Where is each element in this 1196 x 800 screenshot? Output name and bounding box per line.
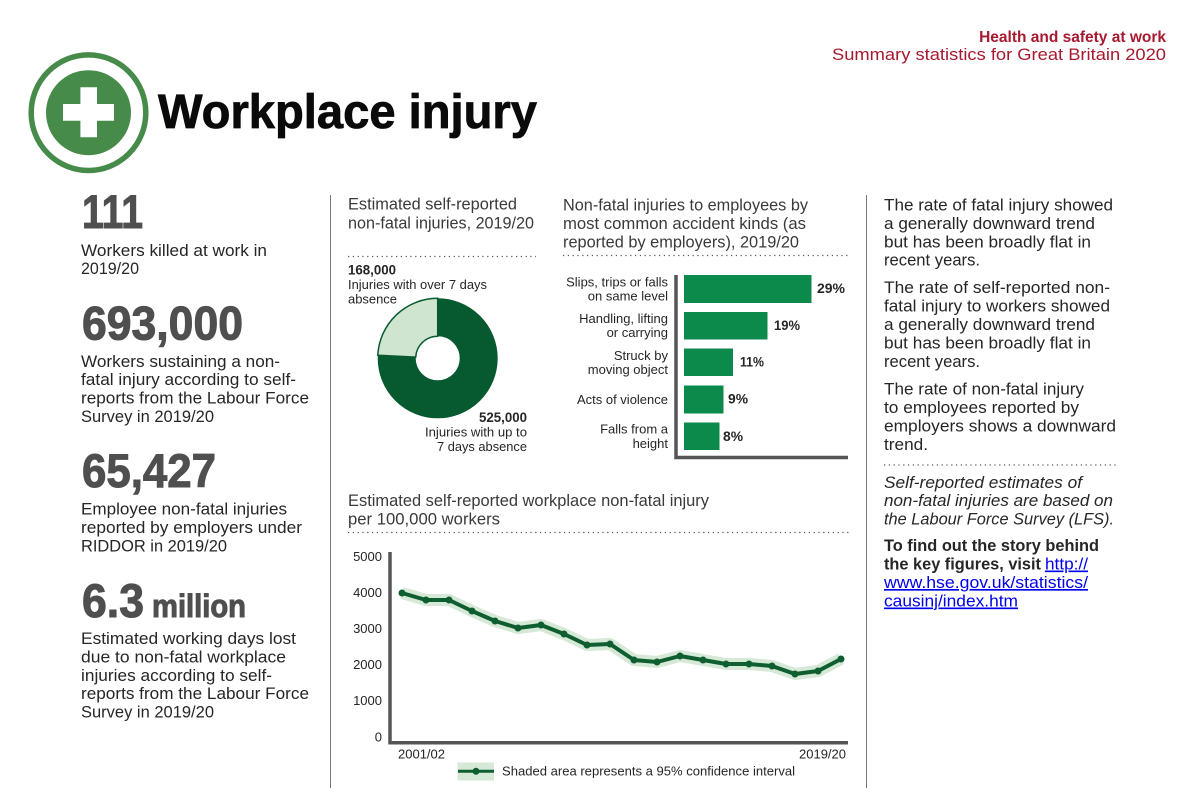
bar chart axes [676,275,848,458]
x axis labels [398,746,846,762]
x axis labels: 2001/02 [398,746,445,762]
heading: donut chart: Estimated self-reported [348,196,517,214]
bar: struck by moving object: Struck by [614,348,668,363]
text: employer-reported injury trend: to employees reported by [884,399,1080,417]
text: link to further information: To find out the story behind [884,537,1099,555]
stat: working days lost: reports from the Labour Force [81,685,309,703]
label: up to 7 days: 7 days absence [437,439,527,454]
y axis labels: 3000 [353,621,382,636]
stat: self-reported non-fatal injuries: reports from the Labour Force [81,390,309,408]
bar: slips, trips or falls: on same level [588,288,668,304]
text: employer-reported injury trend [884,380,1116,454]
stat: workers killed: 111 [82,185,143,238]
stat: self-reported non-fatal injuries: fatal injury according to self- [81,371,296,389]
bar: falls from a height: height [633,436,668,451]
y axis labels: 4000 [353,585,382,600]
stat: working days lost: due to non-fatal workplace [81,648,286,666]
stat: RIDDOR injuries: 65,427 [82,444,216,497]
stat: working days lost: Estimated working days lost [81,630,296,648]
stat: working days lost: injuries according to self- [81,667,272,685]
label: over 7 days: 168,000 [348,262,396,278]
bar: acts of violence: Acts of violence [577,392,668,407]
stat: workers killed: 2019/20 [81,260,139,278]
stat: working days lost: million [152,588,246,624]
y axis labels: 0 [375,730,382,744]
injury rate line [398,590,844,678]
text: link to further information: http:// [1045,556,1088,574]
stat: working days lost [81,574,309,722]
bar: handling, lifting or carrying: or carrying [607,325,668,340]
label: over 7 days [348,262,487,306]
heading: bar chart: Non-fatal injuries to employees by [563,196,809,214]
bar: acts of violence: 9% [728,392,748,406]
header: publication title: Health and safety at work [979,29,1166,46]
heading: bar chart: most common accident kinds (as [563,215,806,233]
bar: handling, lifting or carrying: Handling, lifting [579,311,668,326]
text: link to further information: the key figures, visit [884,556,1041,574]
text: link to further information [883,537,1099,610]
bar: slips, trips or falls [566,274,845,304]
bar: falls from a height [600,422,743,451]
bar: handling, lifting or carrying: 19% [774,318,800,333]
stat: working days lost: 6.3 [82,574,144,627]
stat: RIDDOR injuries [81,444,303,556]
text: self-reported injury trend: The rate of self-reported non- [884,279,1110,297]
label: up to 7 days [425,410,527,454]
x axis labels: 2019/20 [799,746,846,762]
bar: struck by moving object: moving object [588,362,668,377]
stat: RIDDOR injuries: reported by employers under [81,519,303,537]
bar: handling, lifting or carrying [579,311,800,340]
bar: acts of violence [577,386,748,414]
icon: green first aid cross [31,55,146,171]
text: link to further information: causinj/index.htm [884,592,1018,610]
text: self-reported injury trend: fatal injury to workers showed [884,298,1110,316]
bar: slips, trips or falls: Slips, trips or falls [566,274,668,290]
stat: self-reported non-fatal injuries: Survey in 2019/20 [81,408,214,426]
text: fatal injury trend [884,196,1113,270]
text: self-reported injury trend: a generally downward trend [884,316,1095,334]
panel: commentary [883,196,1117,610]
text: fatal injury trend: a generally downward trend [884,215,1095,233]
text: self-reported injury trend [884,279,1110,371]
title: Workplace injury [158,86,537,139]
label: up to 7 days: Injuries with up to [425,424,527,440]
heading: line chart [348,492,710,528]
bar: falls from a height: Falls from a [600,422,669,436]
line chart axes [390,552,848,743]
text: LFS note: Self-reported estimates of [884,474,1085,492]
stat: self-reported non-fatal injuries: 693,000 [82,296,243,350]
stat: working days lost: Survey in 2019/20 [81,704,214,722]
y axis labels: 5000 [353,549,382,564]
text: LFS note [884,474,1114,528]
stat: RIDDOR injuries: RIDDOR in 2019/20 [81,538,227,556]
text: LFS note: non-fatal injuries are based on [884,492,1113,510]
panel: key figures [81,185,309,722]
text: employer-reported injury trend: employers shows a downward [884,418,1116,436]
heading: bar chart: reported by employers), 2019/20 [563,234,799,252]
panel: line chart [348,492,849,780]
text: fatal injury trend: but has been broadly flat in [884,234,1091,252]
stat: workers killed: Workers killed at work in [81,242,267,260]
stat: workers killed [81,185,267,278]
bar: struck by moving object: 11% [740,354,764,370]
text: self-reported injury trend: recent years. [884,353,980,371]
heading: line chart: Estimated self-reported workplace non-fatal injury [348,492,710,510]
heading: line chart: per 100,000 workers [348,510,500,528]
donut: absence share [378,298,479,399]
heading: donut chart [348,196,534,232]
heading: donut chart: non-fatal injuries, 2019/20 [348,214,534,232]
panel: accident kinds bar chart [563,196,849,458]
panel: donut chart [348,196,536,454]
y axis labels: 2000 [353,657,382,672]
y axis labels: 1000 [353,693,382,708]
header: publication title: Summary statistics for Great Britain 2020 [832,45,1166,64]
bar: falls from a height: 8% [723,429,743,444]
header: publication title [832,29,1166,64]
y axis labels [353,549,382,744]
text: employer-reported injury trend: The rate of non-fatal injury [884,380,1085,398]
text: fatal injury trend: recent years. [884,252,980,270]
text: fatal injury trend: The rate of fatal injury showed [884,196,1113,214]
text: link to further information: www.hse.gov.uk/statistics/ [883,574,1088,592]
text: self-reported injury trend: but has been broadly flat in [884,334,1091,352]
label: up to 7 days: 525,000 [479,410,527,425]
label: over 7 days: Injuries with over 7 days [348,277,487,292]
heading: bar chart [563,196,809,252]
legend: Shaded area represents a 95% confidence interval [502,764,795,778]
stat: self-reported non-fatal injuries [81,296,309,426]
text: LFS note: the Labour Force Survey (LFS). [884,510,1114,528]
stat: RIDDOR injuries: Employee non-fatal injuries [81,500,287,518]
bar: struck by moving object [588,348,764,377]
stat: self-reported non-fatal injuries: Workers sustaining a non- [81,353,280,371]
confidence band [402,593,841,674]
label: over 7 days: absence [348,292,397,306]
text: employer-reported injury trend: trend. [884,436,928,454]
bar: slips, trips or falls: 29% [817,281,845,296]
